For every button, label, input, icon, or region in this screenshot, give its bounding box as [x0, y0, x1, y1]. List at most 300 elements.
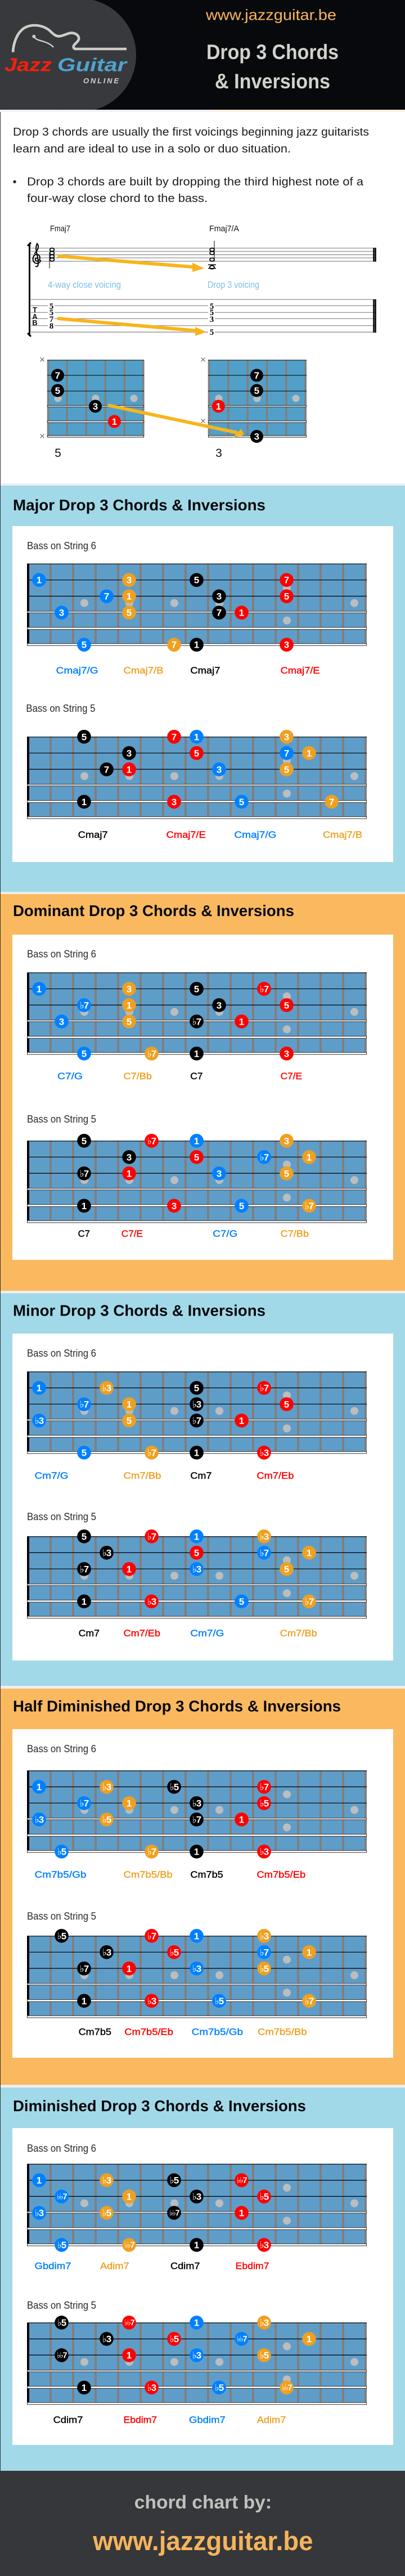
notes: Gbdim7: ♭5 — [57, 2240, 66, 2251]
notes: Adim7 — [257, 2315, 316, 2394]
notes: Cm7/Eb: 1 — [239, 1416, 244, 1426]
notes: Cmaj7/G: 3 — [59, 608, 64, 618]
notes: Cmaj7/G: 7 — [104, 591, 109, 602]
notes: Cm7: ♭3 — [192, 1399, 201, 1410]
notes: Cmaj7/B: 7 — [329, 797, 334, 807]
notes: C7: 3 — [217, 1000, 222, 1011]
chord names: Cm7 — [190, 1470, 212, 1481]
notes: Adim7: ♭5 — [260, 2350, 269, 2361]
notes: Gbdim7: ♭3 — [192, 2350, 201, 2361]
notes: Cm7b5/Bb: 1 — [127, 1798, 132, 1808]
notes: Adim7: 1 — [127, 2192, 132, 2202]
chord names: C7/G — [213, 1228, 237, 1239]
notes: Gbdim7: ♭♭7 — [237, 2335, 248, 2344]
fretboard: half diminished string 6 — [27, 1770, 367, 1859]
section strip — [0, 1291, 405, 1293]
notes: Cm7/G: ♭7 — [260, 1547, 269, 1558]
notes: C7/Bb: 5 — [284, 1168, 289, 1179]
chord names: Cmaj7/G — [56, 665, 98, 676]
notes: C7/Bb: ♭7 — [305, 1201, 314, 1211]
notes: Cm7b5: ♭5 — [170, 1781, 179, 1793]
subheading: string 5: Bass on String 5 — [27, 1910, 96, 1922]
notes: C7: 5 — [194, 984, 199, 994]
strip under header — [0, 110, 405, 112]
chord names — [78, 1228, 309, 1239]
notes: C7/G: 5 — [82, 1048, 87, 1059]
notes: Cmaj7/B: 7 — [172, 640, 177, 650]
notes: C7/Bb — [122, 982, 159, 1061]
notes: Cm7/Bb: ♭3 — [102, 1383, 111, 1393]
arrow: between diagrams — [108, 405, 244, 438]
notes: C7/E: 5 — [194, 1152, 199, 1163]
notation: staff and tab — [28, 224, 376, 337]
notes: Cm7b5 — [167, 1780, 204, 1859]
heading: minor: Minor Drop 3 Chords & Inversions — [13, 1302, 266, 1319]
fretboard: minor string 5 — [27, 1529, 367, 1618]
TAB clef: A — [32, 312, 38, 321]
notes: Cdim7: ♭♭7 — [169, 2209, 180, 2218]
notes: Cm7/Bb: 5 — [127, 1416, 132, 1426]
chord names: Cmaj7/B — [323, 829, 362, 840]
TAB clef: B — [32, 318, 38, 327]
section strip — [0, 2085, 405, 2088]
fretboard: major string 6 — [27, 564, 367, 652]
subheading: string 6: Bass on String 6 — [27, 949, 96, 960]
chord names — [57, 1071, 302, 1081]
notes: Cm7/G: ♭3 — [192, 1564, 201, 1574]
notes: C7/Bb: ♭7 — [147, 1048, 156, 1059]
notes: Cm7b5/Gb: ♭7 — [260, 1947, 269, 1958]
notes: Cm7b5/Bb: ♭7 — [147, 1847, 156, 1857]
notes: Cm7b5/Eb — [235, 1780, 271, 1859]
notes: Adim7: ♭3 — [102, 2175, 111, 2186]
chord names: Cmaj7/E — [281, 665, 320, 676]
notes: Cmaj7/G: 5 — [239, 797, 244, 807]
notes: C7/Bb: 1 — [307, 1152, 312, 1163]
notes: Ebdim7: ♭3 — [147, 2382, 156, 2393]
chord symbols: Fmaj7/A — [209, 224, 239, 234]
intro text — [13, 126, 369, 205]
chord names: Cm7/Eb — [124, 1628, 160, 1639]
notes: Cm7b5: 1 — [82, 1996, 87, 2007]
notes: C7/G: 3 — [59, 1016, 64, 1027]
notes: Cm7b5: ♭7 — [80, 1963, 89, 1974]
notes: Cm7/Bb: 5 — [284, 1564, 289, 1574]
chord diagram: 4-way close: 5 — [55, 447, 61, 460]
TAB clef: T — [33, 306, 37, 314]
notes: Gbdim7: 1 — [194, 2318, 199, 2328]
panel: major section — [0, 486, 405, 892]
tab numbers: 5 — [50, 302, 53, 311]
notes: Cm7 — [190, 1381, 204, 1460]
tab numbers — [48, 302, 215, 337]
notes: Cmaj7/E: 3 — [284, 640, 289, 650]
chord names — [53, 2415, 286, 2425]
notes: C7/E: 1 — [127, 1168, 132, 1179]
notes: C7 — [190, 982, 226, 1061]
notes: Cmaj7/B: 5 — [284, 764, 289, 775]
notes: Cm7b5: ♭5 — [57, 1931, 66, 1941]
notes: Gbdim7: 1 — [37, 2175, 42, 2186]
section strip — [0, 892, 405, 894]
notes: Cmaj7/B: 1 — [127, 591, 132, 602]
notes: Gbdim7 — [190, 2315, 249, 2394]
website url: www.jazzguitar.be — [205, 7, 336, 24]
chord names: Cm7b5/Bb — [124, 1869, 173, 1880]
notes: C7/E: ♭7 — [260, 984, 269, 994]
chord diagram: 4-way close — [40, 358, 144, 460]
chord diagram: drop 3 — [201, 358, 307, 460]
notes: Cm7/G: 5 — [82, 1447, 87, 1458]
voicing captions: 4-way close voicing — [48, 279, 121, 290]
notes: Cmaj7/E: 5 — [194, 748, 199, 759]
notes: Ebdim7: ♭5 — [260, 2192, 269, 2202]
notes: Cm7b5: 1 — [194, 1847, 199, 1857]
notes: Cm7/Eb: 5 — [284, 1399, 289, 1410]
notes: Cm7b5/Eb: ♭5 — [260, 1798, 269, 1808]
notes: Cm7/Bb — [100, 1381, 159, 1460]
chord names — [35, 1869, 305, 1880]
notes: Ebdim7 — [235, 2173, 271, 2252]
subheading: string 6: Bass on String 6 — [27, 540, 96, 551]
chord names: Cm7/Bb — [280, 1628, 317, 1639]
notes: Cm7b5/Gb: 1 — [37, 1781, 42, 1793]
notes: Cm7b5/Bb: ♭5 — [102, 1814, 111, 1825]
chord names — [56, 665, 320, 676]
notes: Cmaj7/B — [280, 730, 339, 809]
notes: Cm7/G — [32, 1381, 91, 1460]
notes: C7/Bb: 1 — [127, 1000, 132, 1011]
chord names: Cm7/G — [35, 1470, 69, 1481]
notes: C7/E — [235, 982, 294, 1061]
logo: Jazz Guitar Online: ONLINE — [83, 77, 119, 85]
notes: Cm7: ♭3 — [102, 1547, 111, 1558]
notes: Cmaj7/G: 1 — [194, 731, 199, 742]
chord diagram: drop 3: 5 — [254, 385, 259, 396]
heading: major: Major Drop 3 Chords & Inversions — [13, 496, 266, 514]
subheading: string 6: Bass on String 6 — [27, 2143, 96, 2154]
arrow: tab drop — [57, 318, 206, 336]
notes: Cdim7 — [167, 2173, 204, 2252]
notes: C7 — [77, 1134, 136, 1213]
noteheads: drop 3 voicing — [208, 241, 216, 269]
tab lines — [31, 299, 376, 326]
notes: C7/E: ♭7 — [147, 1136, 156, 1146]
chord diagram: drop 3: 1 — [216, 401, 221, 412]
notes: Gbdim7: ♭♭7 — [57, 2193, 68, 2202]
chord diagram: 4-way close: 3 — [93, 401, 98, 412]
notes: Cdim7: ♭3 — [102, 2334, 111, 2345]
notes: Adim7 — [100, 2173, 136, 2252]
notes: Cm7/Eb: ♭7 — [260, 1383, 269, 1393]
chord names: Cm7 — [79, 1628, 100, 1639]
notes: Cm7/G — [190, 1529, 271, 1608]
section strip — [0, 483, 405, 486]
chord names: Adim7 — [257, 2415, 286, 2425]
notes: C7: ♭7 — [192, 1016, 201, 1027]
notes: Adim7: ♭♭7 — [282, 2384, 292, 2393]
intro text: Drop 3 chords are usually the first voicings beginning jazz guitarists — [13, 126, 369, 138]
notes: Cmaj7/E: 1 — [127, 764, 132, 775]
notes: Cm7b5/Gb: ♭5 — [215, 1996, 224, 2007]
notes: Cmaj7/E — [235, 573, 294, 652]
notes: Cdim7: ♭5 — [57, 2318, 66, 2328]
notes: Cmaj7/G: 1 — [37, 575, 42, 586]
notes: C7/Bb — [280, 1134, 316, 1213]
notes: Cm7/Eb: 1 — [127, 1564, 132, 1574]
chord names: Ebdim7 — [236, 2261, 269, 2272]
notes: C7/G: 5 — [239, 1201, 244, 1211]
chord names: Cm7/Eb — [256, 1470, 294, 1481]
notes: Cdim7 — [55, 2315, 114, 2394]
notes: C7: 1 — [82, 1201, 87, 1211]
chord names: Cmaj7/E — [166, 829, 206, 840]
notes: C7: 1 — [194, 1048, 199, 1059]
notes: Cmaj7: 3 — [127, 748, 132, 759]
notes: Cm7b5/Eb: ♭3 — [147, 1996, 156, 2007]
notes: Cm7: 5 — [82, 1531, 87, 1542]
notes: Cm7/Eb — [122, 1529, 204, 1608]
notes: C7/G — [32, 982, 91, 1061]
notes: Cmaj7/E — [122, 730, 204, 809]
notes: Cm7b5/Eb: ♭3 — [260, 1847, 269, 1857]
chord names: C7/E — [281, 1071, 302, 1081]
footer credit: chord chart by: — [134, 2492, 272, 2512]
notes: Cm7/Eb: ♭7 — [147, 1531, 156, 1542]
final barlines — [374, 248, 376, 333]
voicing captions — [48, 279, 259, 290]
chord names: Cm7b5 — [79, 2027, 111, 2038]
notes: Cmaj7/E: 5 — [284, 591, 289, 602]
notes: Cm7/Bb: 1 — [307, 1547, 312, 1558]
notes: Cm7/Eb: 5 — [194, 1547, 199, 1558]
panel: diminished section — [0, 2088, 405, 2471]
notes: Cmaj7/E: 1 — [239, 608, 244, 618]
chord names: Adim7 — [100, 2261, 129, 2272]
chord names: Ebdim7 — [124, 2415, 157, 2425]
chord names: C7/Bb — [281, 1228, 309, 1239]
notes: Gbdim7 — [32, 2173, 69, 2252]
heading: half diminished: Half Diminished Drop 3 Chords & Inversions — [13, 1697, 341, 1715]
notes: Gbdim7: ♭5 — [215, 2382, 224, 2393]
chord names: C7 — [78, 1228, 90, 1239]
notes: Cm7b5 — [55, 1929, 114, 2008]
chord names: Cm7b5 — [190, 1869, 223, 1880]
notes: Cm7b5: ♭3 — [192, 1798, 201, 1808]
header banner — [0, 0, 405, 112]
notes: Cm7b5/Bb: ♭3 — [102, 1781, 111, 1793]
panel: dominant section — [0, 894, 405, 1291]
chord names — [35, 1470, 294, 1481]
notes: Cmaj7/G — [190, 730, 294, 809]
subheading: string 5: Bass on String 5 — [27, 2300, 96, 2311]
fretboard: diminished string 5 — [27, 2315, 367, 2404]
title — [206, 41, 339, 93]
fretboard: dominant string 6 — [27, 972, 367, 1061]
notes: C7/E: 3 — [284, 1048, 289, 1059]
notes: Cm7b5/Gb: 1 — [194, 1931, 199, 1941]
notes: Cmaj7 — [77, 730, 136, 809]
notes: Cm7b5/Eb: 1 — [127, 1963, 132, 1974]
panel: half diminished section — [0, 1689, 405, 2085]
notes: Cmaj7: 7 — [217, 608, 222, 618]
notes: Cdim7: 1 — [194, 2240, 199, 2251]
notes: C7/Bb: 5 — [127, 1016, 132, 1027]
notes: Cm7b5/Gb: ♭3 — [192, 1963, 201, 1974]
chord names: C7 — [190, 1071, 202, 1081]
left page border — [0, 112, 1, 2471]
notes: Cm7b5/Gb: ♭7 — [80, 1798, 89, 1808]
notes: Cm7b5/Bb — [100, 1780, 159, 1859]
notes: Cmaj7/B — [122, 573, 181, 652]
heading: diminished: Diminished Drop 3 Chords & Inversions — [13, 2097, 306, 2115]
chord diagram: 4-way close: 1 — [112, 416, 117, 427]
notes: Cm7b5/Bb: ♭3 — [260, 1931, 269, 1941]
intro text: four-way close chord to the bass. — [27, 192, 208, 205]
notes: Cm7b5/Eb: ♭7 — [260, 1781, 269, 1793]
notes: Cdim7: ♭3 — [192, 2192, 201, 2202]
notes: Cm7 — [77, 1529, 114, 1608]
notes: Adim7: ♭♭7 — [124, 2241, 135, 2250]
chord names: C7/Bb — [124, 1071, 152, 1081]
notes: Adim7: ♭3 — [260, 2318, 269, 2328]
notes: Cm7/G: 1 — [194, 1531, 199, 1542]
notes: C7/G: 1 — [194, 1136, 199, 1146]
notes: Cdim7: 1 — [82, 2382, 87, 2393]
notes: Cmaj7/B: 1 — [307, 748, 312, 759]
notes: C7/Bb: 3 — [127, 984, 132, 994]
notes: Cmaj7: 5 — [194, 575, 199, 586]
notes: Ebdim7: ♭5 — [170, 2334, 179, 2345]
subheading: string 6: Bass on String 6 — [27, 1348, 96, 1359]
chord diagram: 4-way close: 7 — [55, 370, 60, 381]
panel: minor section — [0, 1293, 405, 1686]
notes: Cm7b5/Gb — [32, 1780, 91, 1859]
notes: Cm7/Eb: ♭3 — [260, 1447, 269, 1458]
notes: Cmaj7: 1 — [194, 640, 199, 650]
notes: Cmaj7/B: 3 — [127, 575, 132, 586]
notes: Cm7b5/Gb — [190, 1929, 271, 2008]
notes: C7/G: 1 — [37, 984, 42, 994]
notes: Cm7b5: ♭3 — [102, 1947, 111, 1958]
notes: Ebdim7 — [122, 2315, 181, 2394]
notes: Cmaj7/G — [32, 573, 114, 652]
chord diagram: drop 3: 3 — [215, 447, 222, 460]
notes: Cm7/Eb — [235, 1381, 294, 1460]
fretboard: diminished string 6 — [27, 2164, 367, 2252]
tab numbers: 3 — [210, 315, 214, 324]
notes: C7/E — [122, 1134, 204, 1213]
chord names: C7/E — [122, 1228, 143, 1239]
fretboard: half diminished string 5 — [27, 1929, 367, 2018]
subheading: string 5: Bass on String 5 — [27, 1511, 96, 1523]
chord symbols — [50, 224, 239, 234]
notes: Cm7b5/Gb: ♭3 — [35, 1814, 44, 1825]
logo: Jazz Guitar Online — [0, 0, 136, 112]
notes: Cm7/Bb: ♭7 — [147, 1447, 156, 1458]
notes: Ebdim7: ♭♭7 — [237, 2176, 248, 2185]
notes: Cm7b5/Gb: ♭5 — [57, 1847, 66, 1857]
notes: Gbdim7: ♭3 — [35, 2208, 44, 2219]
notes: Cmaj7/G: 5 — [82, 640, 87, 650]
title: & Inversions — [215, 70, 330, 93]
notes: Cm7: 5 — [194, 1383, 199, 1393]
notes: Cm7b5/Bb: ♭7 — [305, 1996, 314, 2007]
subheading: string 5: Bass on String 5 — [27, 1114, 96, 1125]
notes: Ebdim7: ♭♭7 — [124, 2319, 135, 2328]
notes: Cmaj7: 7 — [104, 764, 109, 775]
notes: Cmaj7/G: 3 — [217, 764, 222, 775]
tab numbers: 5 — [50, 308, 53, 317]
chord names: Cm7b5/Bb — [258, 2027, 307, 2038]
fretboard: major string 5 — [27, 730, 367, 819]
chord names — [78, 829, 362, 840]
chord symbols: Fmaj7 — [50, 224, 70, 234]
arrow: staff drop — [57, 256, 204, 272]
notes: Cm7b5/Eb — [122, 1929, 181, 2008]
intro text: Drop 3 chords are built by dropping the third highest note of a — [27, 176, 364, 188]
notes: Cmaj7/E: 3 — [172, 797, 177, 807]
notes: Cm7b5/Eb: ♭7 — [147, 1931, 156, 1941]
chord names: Cm7b5/Eb — [124, 2027, 173, 2038]
notes: Cm7b5/Bb — [257, 1929, 316, 2008]
notes: C7: 3 — [127, 1152, 132, 1163]
notes: Cm7/G: ♭7 — [80, 1399, 89, 1410]
notes: C7/G: ♭7 — [260, 1152, 269, 1163]
notes: Cm7b5/Bb: 1 — [307, 1947, 312, 1958]
treble clef — [33, 244, 40, 267]
subheading: string 5: Bass on String 5 — [26, 703, 95, 714]
notes: C7/G: ♭7 — [80, 1000, 89, 1011]
notes: Cmaj7/E: 7 — [284, 575, 289, 586]
notes: Cdim7: ♭5 — [170, 2175, 179, 2186]
notes: C7/G: 3 — [217, 1168, 222, 1179]
noteheads: close voicing — [50, 248, 54, 268]
notes: C7/Bb: 3 — [284, 1136, 289, 1146]
logo: Jazz Guitar Online: Jazz — [4, 55, 52, 75]
notes: Cmaj7/E: 7 — [172, 731, 177, 742]
notes: Cm7/Bb — [257, 1529, 316, 1608]
chord names: Cmaj7 — [78, 829, 108, 840]
notes: Adim7: 1 — [307, 2334, 312, 2345]
notes: Cmaj7: 1 — [82, 797, 87, 807]
notes: C7/E: 3 — [172, 1201, 177, 1211]
notes: Ebdim7: 1 — [127, 2350, 132, 2361]
heading: dominant: Dominant Drop 3 Chords & Inversions — [13, 902, 294, 919]
chord names: Cmaj7/G — [234, 829, 276, 840]
tab numbers: 8 — [50, 322, 53, 331]
notes: Cm7/Bb: ♭7 — [305, 1596, 314, 1607]
logo: Jazz Guitar Online: Guitar — [57, 55, 128, 75]
notes: Cm7b5/Eb: 1 — [239, 1814, 244, 1825]
notes: Cm7: ♭7 — [80, 1564, 89, 1574]
notes: Cm7/G: 1 — [37, 1383, 42, 1393]
notes: Cdim7: ♭♭7 — [57, 2351, 68, 2360]
notes: Cm7b5/Bb: ♭5 — [260, 1963, 269, 1974]
notes: Cmaj7/G: 7 — [284, 748, 289, 759]
chord diagram: 4-way close: 5 — [55, 385, 60, 396]
chord names: Cm7b5/Gb — [192, 2027, 243, 2038]
chord names: Cmaj7/B — [124, 665, 163, 676]
chord names: Cm7b5/Eb — [256, 1869, 305, 1880]
notes: Cm7: ♭7 — [192, 1416, 201, 1426]
subheading: string 6: Bass on String 6 — [27, 1743, 96, 1754]
notes: Cm7/Bb: ♭3 — [260, 1531, 269, 1542]
notes: Cmaj7/B: 5 — [127, 608, 132, 618]
staff lines — [31, 252, 376, 261]
notes: Cm7b5/Eb: ♭5 — [170, 1947, 179, 1958]
TAB clef — [32, 306, 38, 327]
